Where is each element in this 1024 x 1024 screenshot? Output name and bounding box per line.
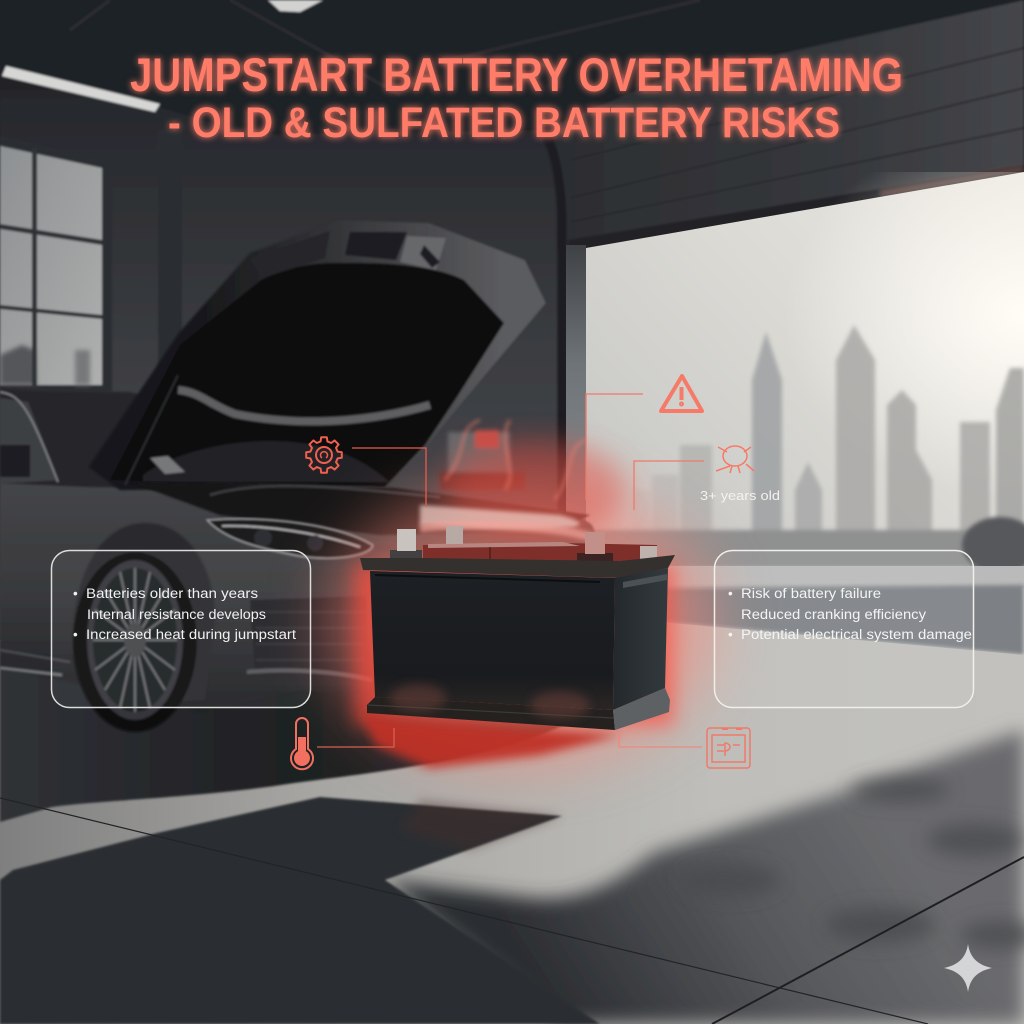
connector: thermometer [317, 728, 394, 747]
windshield [143, 441, 389, 482]
garage floor [0, 622, 1024, 1024]
panel: risks: Risk of battery failure [741, 586, 881, 601]
ceiling lights [2, 66, 160, 112]
panel: causes: Internal resistance develops [87, 607, 266, 622]
icon: aged battery [716, 446, 754, 473]
icon: gear [306, 437, 342, 473]
icon: warning triangle [661, 376, 702, 411]
hood strut [125, 375, 178, 485]
title [130, 48, 903, 147]
battery front face [370, 571, 615, 710]
connector: warning [586, 394, 643, 500]
red heat glow around battery [325, 420, 715, 768]
panel: causes: Batteries older than years [86, 586, 258, 601]
age label: 3+ years old [700, 488, 780, 503]
battery side face [613, 568, 668, 710]
panel: risks: • [728, 586, 733, 601]
panel: causes [52, 550, 310, 708]
engine bay [130, 482, 590, 535]
wheel [72, 523, 215, 732]
title: JUMPSTART BATTERY OVERHETAMING [130, 48, 903, 101]
car battery [360, 526, 675, 730]
panel: causes: • [73, 627, 78, 642]
garage door with slats [540, 0, 1024, 530]
icon: thermometer [291, 718, 313, 769]
battery lid and caps [423, 543, 657, 572]
icon: sparkle watermark [944, 944, 992, 992]
title: - OLD & SULFATED BATTERY RISKS [168, 99, 840, 147]
corrosion specks [390, 684, 446, 712]
connector: gear [352, 448, 426, 505]
battery base [367, 697, 615, 730]
panel: risks: • [728, 627, 733, 642]
panel: causes: • [73, 586, 78, 601]
panel: risks: Reduced cranking efficiency [741, 607, 926, 622]
outside city skyline view [566, 172, 1024, 660]
car body [0, 483, 600, 712]
window on left wall [0, 136, 112, 392]
garage tool chest behind battery [440, 430, 525, 490]
battery top rim [360, 555, 675, 578]
open hood of car [89, 220, 546, 490]
battery terminals [390, 550, 422, 558]
car side window and roof [0, 388, 160, 490]
panel: risks: Potential electrical system damage [741, 627, 972, 642]
panel: causes: Increased heat during jumpstart [86, 627, 296, 642]
connector: age [634, 461, 704, 510]
icon: sulfation plate [707, 728, 750, 768]
panel: risks [714, 550, 974, 708]
connector: plate [619, 733, 702, 747]
headlight [207, 519, 373, 558]
